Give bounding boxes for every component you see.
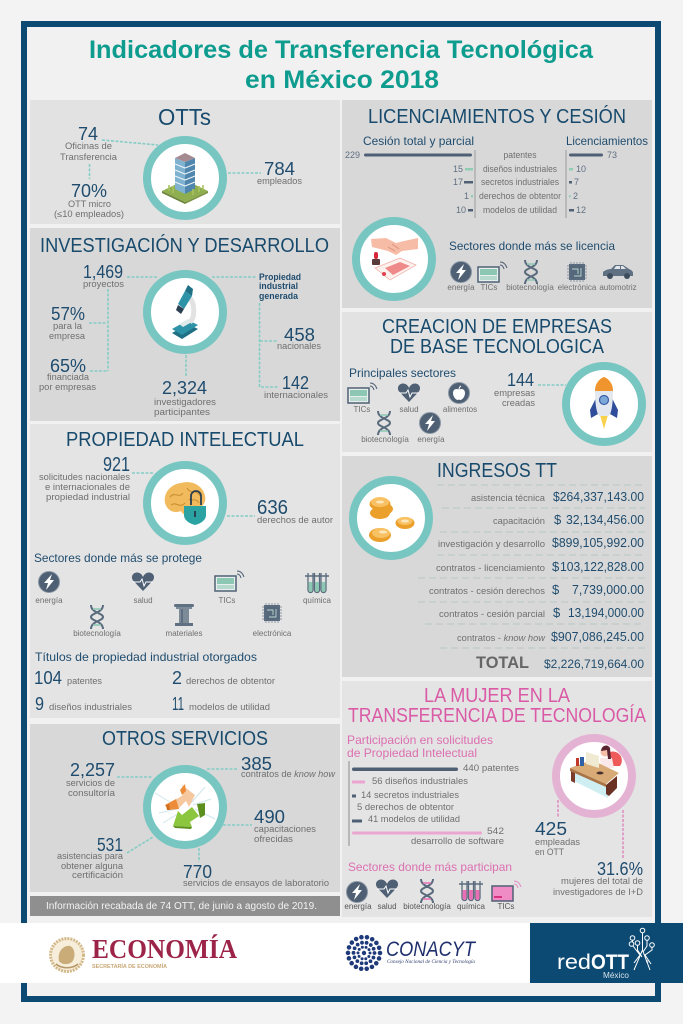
subheading: participación: de Propiedad Intelectual [347, 746, 477, 760]
table: ingresos por concepto: $ [552, 582, 560, 597]
sector: biotecnología: biotecnología [361, 435, 409, 444]
sector: química [457, 881, 486, 911]
bar chart: cesión y licenciamientos: 15 [453, 164, 463, 174]
sector: TICs [348, 383, 377, 414]
stat: 57%: empresa [49, 331, 85, 341]
sector: biotecnología [506, 260, 554, 292]
heading [382, 316, 612, 358]
heading [348, 685, 647, 727]
total: $2,226,719,664.00 [544, 657, 644, 671]
sector: TICs [492, 881, 521, 911]
logo: CONACYT [348, 937, 477, 969]
connectors [132, 473, 255, 516]
stat: patentes: patentes [67, 676, 103, 686]
stat: empleadas: en OTT [535, 847, 564, 857]
text: propiedad industrial generada: Propiedad [259, 272, 301, 282]
table: ingresos por concepto: $ [552, 559, 560, 574]
sector: salud: salud [377, 902, 397, 911]
sector: energía [447, 262, 475, 292]
stat: empleadas [535, 819, 581, 857]
connectors [90, 140, 261, 179]
stat: asistencias: obtener alguna [61, 861, 123, 871]
sector: TICs: TICs [498, 902, 514, 911]
table: ingresos por concepto: $907,086,245.00 [551, 629, 644, 644]
icon: coins [353, 480, 429, 556]
sector: electrónica [253, 603, 292, 638]
table: ingresos por concepto: 7,739,000.00 [572, 582, 644, 597]
sector: TICs [215, 571, 244, 605]
sector: química: química [457, 902, 486, 911]
bar chart: cesión y licenciamientos [345, 150, 617, 218]
stat: empresas creadas: 144 [507, 370, 534, 390]
heading: OTROS SERVICIOS [102, 728, 268, 750]
stat: capacitaciones: 490 [254, 807, 285, 827]
heading: TRANSFERENCIA DE TECNOLOGÍA [348, 704, 647, 727]
stat: investigadores [154, 378, 217, 417]
heading: INGRESOS TT [437, 460, 557, 482]
stat: 74 oficinas: Oficinas de [65, 141, 112, 151]
bar chart: cesión y licenciamientos: 12 [576, 205, 586, 215]
stat: internacionales: internacionales [264, 390, 329, 400]
sector: materiales [166, 604, 202, 638]
icon: arrows exchange [147, 769, 223, 845]
stat: patentes [34, 668, 103, 688]
stat: 57%: 57% [51, 304, 85, 324]
logo: Secretaría de Economía: ECONOMÍA [92, 934, 237, 964]
stat: asistencias: asistencias para [57, 851, 123, 861]
logo: CONACYT: Consejo Nacional de Ciencia y Tecnología [387, 960, 475, 965]
sector: TICs [478, 262, 507, 292]
icon: rocket [566, 366, 642, 442]
panel: Otros servicios [30, 724, 340, 892]
stat: know how: 385 [241, 754, 272, 774]
stat: consultoría: servicios de [66, 778, 115, 788]
logo: redOTT México: red [557, 951, 591, 974]
stat: 70% micro: (≤10 empleados) [54, 209, 124, 219]
sector: salud [376, 880, 398, 911]
sector: TICs: TICs [354, 405, 370, 414]
stat: consultoría: consultoría [68, 788, 115, 798]
footer logos band [0, 923, 683, 983]
stat: nacionales [277, 325, 322, 351]
bar chart: cesión y licenciamientos: modelos de utilidad [483, 205, 557, 215]
table: ingresos por concepto: 32,134,456.00 [566, 512, 644, 527]
stat: 65% [39, 356, 97, 392]
sector: energía: energía [447, 283, 475, 292]
note: fuente [30, 896, 340, 916]
bar chart: participación: 542 [487, 826, 504, 836]
panel: Licenciamientos y cesión [342, 100, 652, 308]
sector: salud [132, 572, 154, 605]
stat: investigadores: investigadores [154, 397, 217, 407]
table: ingresos por concepto: contratos - know how [457, 633, 546, 643]
sector: alimentos: alimentos [443, 405, 477, 414]
stat: asistencias: 531 [97, 835, 123, 855]
stat: diseños [35, 694, 133, 714]
sector: energía [344, 882, 372, 911]
heading: sectores participan: Sectores donde más participan [348, 860, 512, 874]
stat: 70% micro: OTT micro [68, 199, 111, 209]
sector: materiales: materiales [166, 629, 202, 638]
stat: investigadoras: 31.6% [597, 859, 643, 879]
heading: OTTs: OTTs [158, 104, 211, 130]
sector: energía: energía [35, 596, 63, 605]
stat: capacitaciones [254, 807, 317, 844]
stat: solicitudes: 921 [103, 454, 130, 476]
bar chart: cesión y licenciamientos: 229 [345, 150, 360, 160]
bar chart: cesión y licenciamientos: diseños industriales [483, 164, 557, 174]
table: ingresos por concepto: $264,337,143.00 [553, 489, 644, 504]
connectors [558, 800, 623, 858]
stat: 74 oficinas: 74 [78, 124, 98, 144]
stat: derechos de obtentor [172, 668, 275, 688]
stat: consultoría [66, 760, 115, 798]
stat: investigadores: participantes [154, 407, 211, 417]
connectors [89, 277, 278, 387]
bar chart: participación: 14 secretos industriales [361, 790, 460, 800]
sector: biotecnología: biotecnología [403, 902, 451, 911]
stat: internacionales: 142 [282, 373, 309, 393]
stat: investigadoras: investigadores de I+D [553, 887, 644, 897]
stat: asistencias: certificación [72, 870, 123, 880]
heading: CREACION DE EMPRESAS [382, 316, 612, 338]
stat: empresas creadas: empresas [494, 388, 536, 398]
subheading: licenciamientos: Licenciamientos [566, 134, 648, 148]
sector: TICs: TICs [219, 596, 235, 605]
stat: internacionales [264, 373, 329, 400]
stat: proyectos: 1,469 [83, 262, 123, 282]
bar chart: participación: 56 diseños industriales [372, 776, 469, 786]
dot emblem [348, 937, 380, 969]
panel: Investigación y Desarrollo [30, 228, 340, 421]
panel: Creación de empresas [342, 312, 652, 452]
bar chart: participación: 5 derechos de obtentor [357, 802, 454, 812]
subheading: participación: Participación en solicitudes [347, 733, 493, 747]
title: en México 2018 [245, 66, 439, 94]
table: ingresos por concepto: contratos - cesión derechos [429, 586, 546, 596]
stat: empresas creadas: creadas [502, 398, 536, 408]
note: fuente: Información recabada de 74 OTT, de junio a agosto de 2019. [46, 901, 317, 912]
heading: títulos: Títulos de propiedad industrial otorgados [35, 650, 257, 664]
sector: salud: salud [399, 405, 419, 414]
connectors [117, 769, 252, 862]
heading: PROPIEDAD INTELECTUAL [66, 429, 304, 451]
bar chart: cesión y licenciamientos: 1 [464, 191, 469, 201]
sector: electrónica: electrónica [253, 629, 292, 638]
stat: nacionales: nacionales [277, 341, 322, 351]
stat: 74 oficinas [60, 124, 117, 162]
bar chart: cesión y licenciamientos: 10 [576, 164, 586, 174]
stat: 74 oficinas: Transferencia [60, 152, 117, 162]
logo: redOTT México: OTT [591, 951, 629, 974]
stat: asistencias [57, 835, 123, 880]
stat: investigadoras: mujeres del total de [561, 876, 643, 886]
sector: biotecnología [73, 605, 121, 638]
sector: biotecnología: biotecnología [506, 283, 554, 292]
sector: química [303, 573, 332, 605]
sector: TICs: TICs [481, 283, 497, 292]
sector: energía [35, 572, 63, 605]
logo: CONACYT: CONACYT [386, 938, 477, 961]
stat: know how [241, 754, 336, 779]
icon: tree network [629, 928, 654, 970]
icon: brain with lock [147, 465, 223, 541]
stat: solicitudes [39, 454, 131, 502]
stat: solicitudes: e internacionales de [45, 482, 130, 492]
sector: química: química [303, 596, 332, 605]
stat: capacitaciones: ofrecidas [254, 834, 294, 844]
sector: biotecnología: biotecnología [73, 629, 121, 638]
stat: 65%: 65% [50, 356, 86, 376]
stat: empleadas: 425 [535, 819, 567, 839]
subheading: principales sectores: Principales sectores [349, 366, 456, 380]
sector: energía [417, 412, 445, 444]
sector: salud: salud [133, 596, 153, 605]
table: ingresos por concepto: $ [554, 512, 562, 527]
panel: La mujer en la transferencia [342, 681, 652, 917]
stat: 57% [49, 304, 85, 341]
bar chart: participación: desarrollo de software [411, 836, 504, 846]
logo: redOTT México: ® [646, 959, 649, 964]
stat: diseños: diseños industriales [49, 702, 133, 712]
table: ingresos por concepto: capacitación [493, 516, 545, 526]
heading: sectores protege: Sectores donde más se protege [34, 551, 202, 565]
bar chart: cesión y licenciamientos: patentes [504, 150, 537, 160]
text: propiedad industrial generada [259, 272, 301, 301]
stat: proyectos: proyectos [83, 279, 125, 289]
bar chart: cesión y licenciamientos: 2 [573, 191, 578, 201]
heading: DE BASE TECNOLOGICA [390, 336, 605, 358]
panel: Propiedad Intelectual [30, 424, 340, 718]
stat: empresas creadas [494, 370, 536, 408]
bar chart: participación: 440 patentes [463, 763, 520, 773]
sector: electrónica: electrónica [558, 283, 597, 292]
stat: nacionales: 458 [284, 325, 315, 345]
sector: energía: energía [344, 902, 372, 911]
stat: modelos: modelos de utilidad [189, 702, 270, 712]
bar chart: cesión y licenciamientos: 17 [453, 177, 463, 187]
heading: LICENCIAMIENTOS Y CESIÓN [368, 105, 626, 128]
stat: modelos [172, 694, 270, 714]
table: ingresos por concepto: 13,194,000.00 [568, 605, 644, 620]
bar chart: cesión y licenciamientos: 7 [574, 177, 579, 187]
stat: consultoría: 2,257 [70, 760, 115, 780]
stat: proyectos [83, 262, 125, 289]
stat: investigadores: 2,324 [162, 378, 207, 398]
logo: Secretaría de Economía: SECRETARÍA DE ECONOMÍA [92, 962, 167, 970]
sector: automotriz [599, 265, 637, 292]
heading: LA MUJER EN LA [424, 685, 571, 707]
bar chart: participación: 41 modelos de utilidad [368, 814, 460, 824]
table: ingresos por concepto: $899,105,992.00 [552, 535, 644, 550]
bar chart: cesión y licenciamientos: derechos de obtentor [479, 191, 561, 201]
stat: 70% micro: 70% [71, 181, 107, 201]
bar chart: cesión y licenciamientos: 10 [456, 205, 466, 215]
heading: sectores licencia: Sectores donde más se licencia [449, 239, 615, 253]
table: ingresos por concepto: 103,122,828.00 [560, 559, 644, 574]
heading: INVESTIGACIÓN Y DESARROLLO [40, 234, 329, 257]
sector: alimentos [443, 382, 477, 414]
title [89, 36, 594, 94]
total: TOTAL [476, 653, 529, 672]
stat: derechos de autor [257, 497, 333, 525]
stat: solicitudes: propiedad industrial [46, 492, 130, 502]
stat: modelos: 11 [172, 694, 184, 714]
stat: 65%: financiada [47, 372, 89, 382]
stat: 70% micro [54, 181, 124, 219]
table: ingresos por concepto: contratos - licenciamiento [436, 563, 545, 573]
stat: derechos de obtentor: 2 [172, 668, 182, 688]
icon: building [147, 140, 223, 216]
stat: 57%: para la [53, 321, 82, 331]
stat: derechos de obtentor: derechos de obtentor [186, 676, 275, 686]
stat: 784 [257, 159, 303, 186]
sector: automotriz: automotriz [599, 283, 637, 292]
sector: biotecnología [361, 411, 409, 444]
stat: investigadoras [553, 859, 644, 897]
text: propiedad industrial generada: industrial [259, 281, 298, 291]
connector [538, 384, 566, 386]
subheading: cesión: Cesión total y parcial [363, 134, 474, 148]
seal [50, 938, 84, 972]
stat: 784: empleados [257, 176, 303, 186]
sector: salud [398, 384, 420, 414]
icon: woman at desk [556, 738, 632, 814]
subheading: participación [347, 733, 493, 760]
stat: laboratorio: servicios de ensayos de laboratorio [183, 878, 329, 888]
text: propiedad industrial generada: generada [259, 291, 299, 301]
stat: patentes: 104 [34, 668, 62, 688]
panel: Ingresos TT [342, 456, 652, 677]
logo: redOTT México [530, 923, 683, 983]
stat: 784: 784 [264, 159, 295, 179]
stat: derechos de autor: 636 [257, 497, 288, 519]
table: ingresos por concepto: contratos - cesión parcial [439, 609, 545, 619]
total [476, 653, 644, 672]
sector: energía: energía [417, 435, 445, 444]
stat: derechos de autor: derechos de autor [257, 515, 333, 525]
sector: biotecnología [403, 879, 451, 911]
separators [418, 485, 645, 648]
stat: laboratorio [183, 862, 329, 888]
title: Indicadores de Transferencia Tecnológica [89, 36, 594, 64]
table: ingresos por concepto: investigación y desarrollo [438, 539, 545, 549]
stat: 65%: por empresas [39, 382, 97, 392]
stat: know how: contratos de know how [241, 769, 336, 779]
icon: microscope [147, 274, 223, 350]
sector: electrónica [558, 262, 597, 292]
logo: Secretaría de Economía [50, 934, 237, 972]
stat: empleadas: empleadas [535, 837, 581, 847]
stat: capacitaciones: capacitaciones [254, 824, 317, 834]
table: ingresos por concepto: $ [553, 605, 561, 620]
table: ingresos por concepto [429, 489, 644, 644]
logo: redOTT México: México [603, 971, 630, 980]
stat: diseños: 9 [35, 694, 44, 714]
stat: solicitudes: solicitudes nacionales [39, 472, 131, 482]
panel: OTTs [30, 100, 340, 224]
bar chart: cesión y licenciamientos: secretos industriales [481, 177, 559, 187]
stat: laboratorio: 770 [183, 862, 212, 882]
bar chart: participación [349, 761, 520, 846]
icon: handshake and contract [356, 221, 432, 297]
bar chart: cesión y licenciamientos: 73 [607, 150, 617, 160]
table: ingresos por concepto: asistencia técnica [471, 493, 545, 503]
